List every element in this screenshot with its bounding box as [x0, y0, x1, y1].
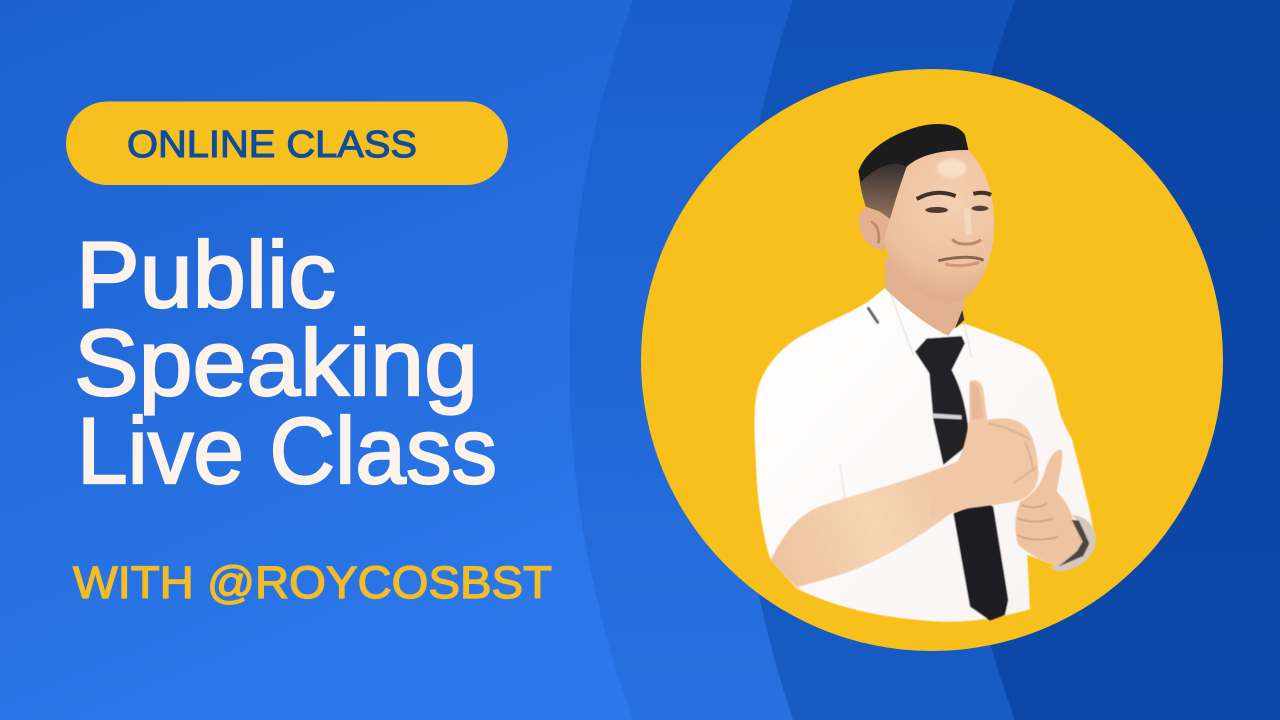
- tie: [915, 336, 970, 465]
- ear: [858, 208, 892, 250]
- title: Speaking: [74, 310, 478, 415]
- title: Public: [76, 222, 336, 327]
- forearm: [771, 457, 993, 587]
- presenter photo illustration: [755, 124, 1096, 622]
- badge: online class: [66, 102, 508, 185]
- subtitle: presenter handle: WITH @ROYCOSBST: [73, 557, 552, 608]
- title: Live Class: [77, 398, 497, 503]
- title: [74, 222, 497, 503]
- brows: [917, 193, 991, 199]
- mouth: [938, 257, 984, 261]
- head: [858, 124, 994, 336]
- forehead highlight: [937, 159, 967, 178]
- front fist with thumb up: [930, 380, 1038, 518]
- wristwatch: [1058, 520, 1089, 567]
- yellow circle behind presenter: [641, 69, 1223, 651]
- tie clip: [932, 413, 962, 419]
- eyes: [925, 207, 948, 213]
- nose: [952, 239, 981, 244]
- fade side hair: [859, 155, 907, 219]
- shirt cuff: [1050, 515, 1096, 572]
- badge: online class: ONLINE CLASS: [127, 124, 417, 166]
- body: shirt, tie and forearm: [755, 287, 1095, 622]
- shirt: [755, 287, 1095, 622]
- face: [883, 150, 994, 303]
- neck: [885, 258, 966, 336]
- back hand with thumb up: [1015, 450, 1087, 565]
- hands and wrist: [930, 380, 1096, 572]
- hair: [858, 124, 968, 182]
